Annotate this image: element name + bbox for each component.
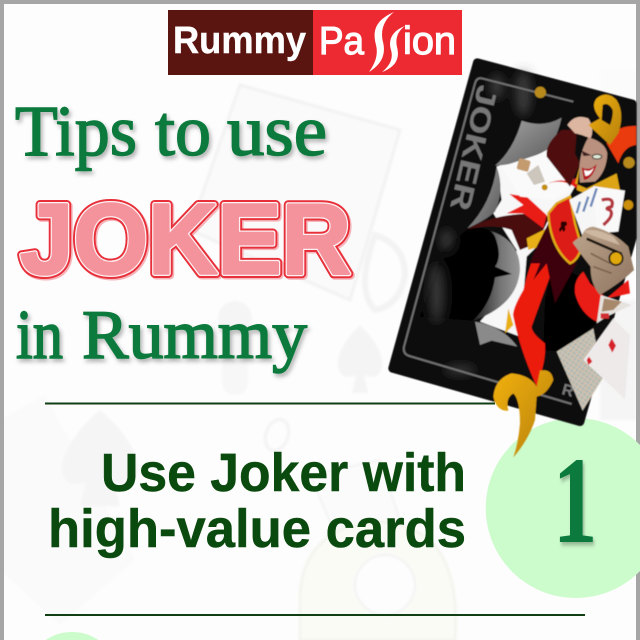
JOKER pink fill: JOKER — [20, 184, 351, 296]
small patterned card — [597, 295, 632, 323]
step number 1: 1 — [553, 433, 597, 570]
jester red leg — [513, 243, 557, 387]
title line: Tips to use — [15, 91, 327, 171]
eye left — [582, 151, 592, 156]
hat red right — [607, 126, 636, 163]
eye — [592, 154, 602, 159]
logo word Pa: Pa — [319, 20, 364, 63]
card label JOKER: JOKER — [443, 82, 503, 214]
red scarf — [548, 177, 578, 188]
fan card left — [569, 187, 610, 238]
fan card right — [593, 186, 625, 233]
hand — [573, 227, 634, 295]
finger dark gap — [587, 239, 622, 254]
smile — [582, 164, 597, 180]
jester maroon sleeve — [547, 130, 580, 187]
jester red torso — [548, 197, 582, 263]
jester yellow sash — [505, 228, 547, 333]
thumb highlight — [584, 230, 620, 245]
hat gold horn — [588, 95, 621, 145]
corner pip — [587, 357, 592, 365]
word to: to — [155, 91, 211, 171]
club mark on torso — [559, 221, 567, 232]
white sleeve flame red — [507, 194, 547, 228]
fist — [567, 117, 592, 138]
torn white opening — [480, 147, 577, 337]
word Rummy: Rummy — [82, 297, 307, 374]
jester boot gold — [493, 370, 553, 457]
next step green circle — [46, 632, 98, 640]
card smoke shading — [429, 70, 532, 375]
divider line under title — [45, 402, 495, 404]
green number circle — [486, 418, 640, 598]
gold ring — [609, 252, 623, 265]
title line: in Rummy — [16, 297, 307, 374]
fan card marks — [577, 188, 597, 213]
JOKER pink shadow: JOKER — [22, 185, 352, 297]
king card red mark — [601, 313, 609, 319]
dice — [516, 158, 531, 172]
dark bat shape beside flaps — [420, 228, 512, 321]
teeth — [584, 167, 594, 176]
torn flap lower — [475, 322, 517, 347]
heading line two: high-value cards — [48, 499, 466, 559]
black hair strip — [575, 133, 585, 163]
fan queen figures — [602, 199, 612, 225]
card fan — [569, 186, 625, 238]
small card letter R: R — [560, 381, 576, 401]
finger creases — [591, 253, 612, 273]
word Tips: Tips — [15, 91, 137, 171]
king card print — [602, 298, 622, 312]
jester second leg black — [543, 263, 597, 352]
card ornaments — [535, 87, 546, 98]
white shirt arm — [502, 152, 570, 200]
hat horn inner gap — [602, 104, 613, 125]
king card — [597, 295, 632, 323]
joker card illustration — [393, 63, 636, 457]
logo dark panel — [168, 10, 313, 75]
logo swirl letters — [369, 12, 405, 72]
divider line under step — [45, 614, 585, 616]
gold bell — [542, 184, 548, 190]
JOKER red outline: JOKER — [20, 184, 351, 296]
logo word Rummy: Rummy — [173, 20, 306, 62]
heading line one: Use Joker with — [101, 443, 466, 503]
word in: in — [16, 297, 63, 374]
torn flap middle — [473, 230, 520, 321]
patterned card back — [557, 328, 603, 411]
logo red panel — [313, 10, 462, 75]
jester dark leg panel — [530, 220, 577, 303]
right shoulder bell — [623, 200, 633, 210]
hat yellow collar — [575, 165, 620, 197]
card inner border — [404, 78, 573, 404]
red cuff — [575, 272, 630, 322]
card body — [393, 63, 632, 422]
white ace of diamonds card — [583, 318, 630, 399]
diamond pip — [608, 338, 616, 353]
jester dark sash — [467, 213, 550, 250]
torn flap left — [467, 167, 500, 228]
torn flap top — [495, 118, 562, 166]
word use: use — [227, 91, 327, 171]
held grey card with dice — [527, 165, 545, 185]
title word: JOKER — [20, 184, 352, 297]
jester face — [579, 137, 607, 183]
logo word ion: ion — [403, 20, 456, 63]
logo: Rummy Passion — [168, 10, 462, 75]
step heading: Use Joker with high-value cards — [48, 443, 466, 559]
JOKER white gap: JOKER — [20, 184, 351, 296]
